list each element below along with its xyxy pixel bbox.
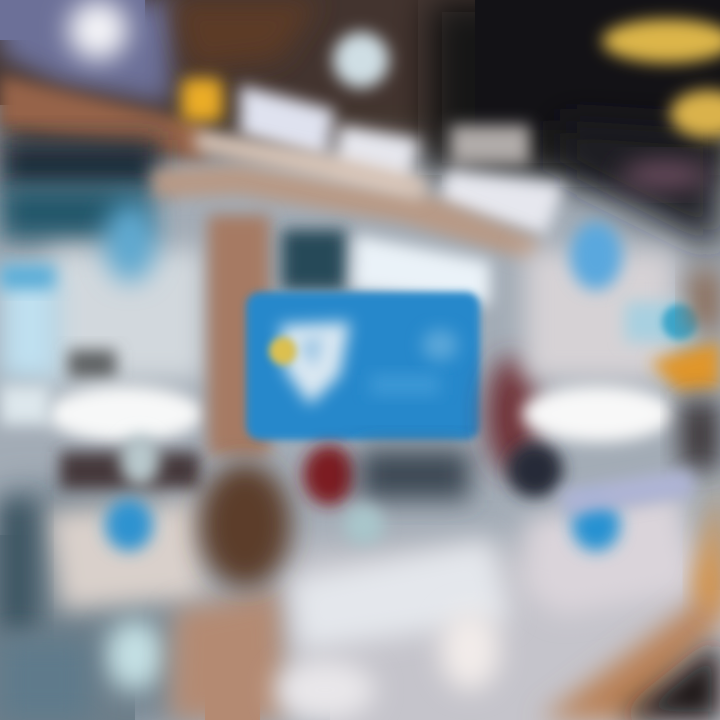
blue card — [246, 292, 480, 440]
card detail text smudge — [422, 329, 458, 361]
yellow ceiling light top — [602, 19, 720, 63]
pillar base edge fill — [205, 650, 260, 720]
left dark floor strip — [0, 500, 36, 630]
floor light panel — [290, 540, 510, 650]
dark neck — [68, 350, 116, 378]
left floor — [0, 640, 90, 720]
right blue badge top — [570, 222, 622, 290]
dark corner — [620, 640, 720, 720]
right kiosk — [275, 222, 720, 720]
right white table — [522, 386, 674, 442]
card logo yellow — [269, 337, 297, 365]
pale teal glow — [344, 505, 384, 545]
dark figure lower — [507, 442, 563, 498]
wooden pillar — [208, 215, 270, 455]
yellow ceiling light lower — [670, 90, 720, 138]
left lower glow — [105, 619, 165, 691]
right lower box — [525, 490, 695, 615]
pale pedestal — [120, 434, 160, 486]
centre pillar — [170, 215, 490, 720]
pillar base — [170, 590, 285, 720]
dark side strip — [690, 270, 720, 330]
people in front of card — [303, 357, 563, 545]
wooden counter beam — [150, 165, 540, 262]
teal dot — [662, 304, 698, 340]
round ceiling lamp — [333, 32, 389, 88]
glare on top left panel — [68, 0, 128, 60]
wood shelf top — [195, 130, 430, 200]
left blue screen — [0, 270, 60, 380]
dark red figure — [486, 357, 538, 473]
orange side glow — [650, 340, 720, 392]
card logo white — [280, 322, 350, 405]
red shirt — [303, 445, 355, 505]
dark crowd — [360, 450, 470, 500]
left blue badge — [105, 499, 153, 551]
floor glare left — [275, 660, 375, 720]
orange right corner — [695, 480, 720, 620]
floor lower glare — [440, 610, 500, 690]
left blue sign — [104, 202, 156, 282]
top left panel — [0, 0, 175, 105]
right teal sign — [625, 302, 697, 342]
teal band left — [0, 185, 150, 240]
bright white backdrop — [352, 235, 490, 305]
left white columns — [50, 250, 205, 380]
dark ceiling band right — [560, 120, 720, 250]
top left panel edge fill — [0, 0, 145, 40]
dark right side — [680, 400, 720, 470]
left white table — [47, 386, 203, 442]
left lower box — [45, 500, 205, 612]
orange lamp — [181, 78, 223, 122]
right blue badge — [572, 499, 620, 551]
card detail smudge lower — [370, 375, 440, 395]
dark strip under table — [60, 452, 200, 490]
orange wood floor — [540, 500, 720, 720]
wooden beam left — [0, 75, 205, 160]
ceiling beams and lights — [0, 0, 720, 262]
brown person seated — [199, 463, 291, 587]
card logo blue notch — [300, 335, 322, 368]
hanging white signs — [240, 85, 565, 235]
dark teal backdrop — [282, 230, 346, 290]
left blue stripe — [0, 265, 55, 289]
right white wall — [525, 250, 675, 380]
dark navy under beam — [0, 140, 160, 190]
brown ceiling — [170, 0, 320, 70]
pink ceiling glow — [620, 161, 710, 189]
left kiosk — [0, 202, 205, 720]
card body — [246, 292, 480, 440]
left white side table — [0, 385, 50, 425]
right purple stripe — [560, 470, 695, 515]
